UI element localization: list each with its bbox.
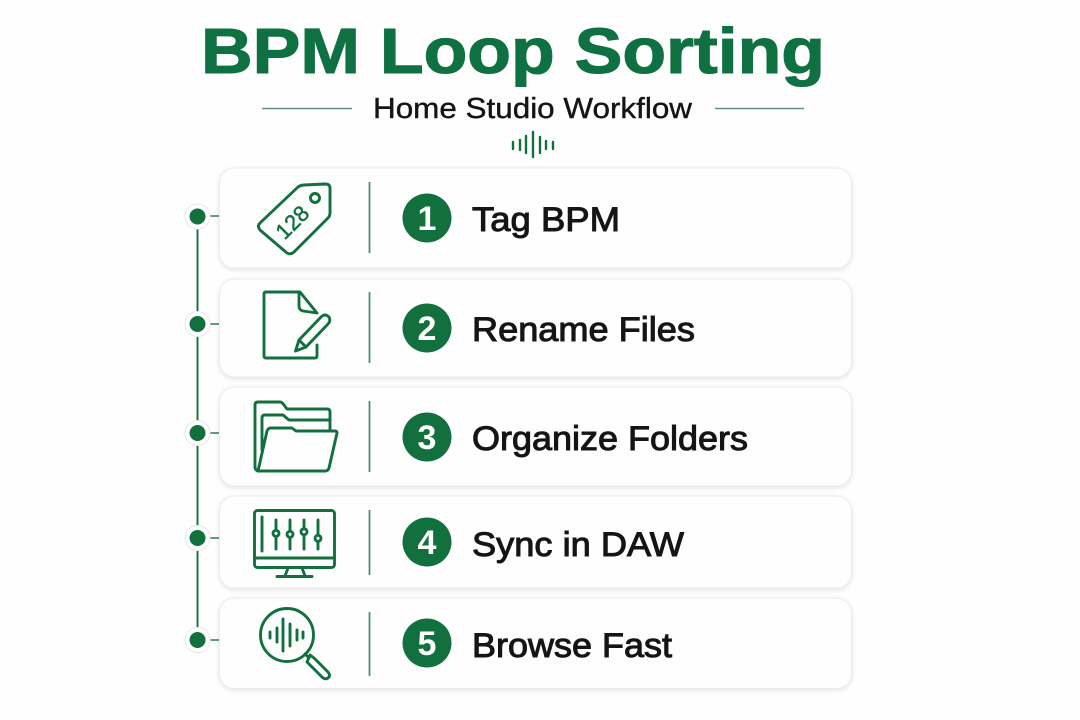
number badge 1 bbox=[402, 194, 452, 242]
icon: magnifier with waveform bbox=[260, 608, 330, 679]
icon: open folders bbox=[255, 402, 337, 471]
number badge 1: 1 bbox=[418, 200, 436, 238]
timeline rail bbox=[185, 204, 219, 652]
label: Rename Files bbox=[472, 311, 695, 349]
label: Organize Folders bbox=[472, 420, 748, 458]
number badge 2: 2 bbox=[418, 310, 436, 348]
subtitle with side rules: Home Studio Workflow bbox=[373, 93, 693, 125]
icon: monitor with faders bbox=[254, 510, 334, 576]
number badge 5 bbox=[402, 618, 452, 668]
timeline node 1 bbox=[185, 204, 219, 229]
panel: step 4 Sync in DAW bbox=[220, 496, 852, 588]
number badge 2 bbox=[402, 304, 452, 352]
number badge 4 bbox=[402, 518, 452, 566]
title: BPM Loop Sorting bbox=[201, 15, 825, 87]
panel: step 5 Browse Fast bbox=[220, 598, 852, 688]
number badge 5: 5 bbox=[418, 625, 436, 663]
icon: price tag 128: 128 bbox=[271, 201, 314, 244]
number badge 3 bbox=[402, 412, 452, 462]
timeline node 2 bbox=[185, 312, 219, 336]
panel: step 3 Organize Folders bbox=[220, 387, 852, 486]
label: Sync in DAW bbox=[472, 526, 684, 564]
label: Tag BPM bbox=[472, 201, 620, 239]
icon: document with pencil bbox=[264, 292, 330, 358]
label: Browse Fast bbox=[472, 627, 672, 665]
number badge 4: 4 bbox=[418, 524, 437, 562]
panel: step 1 Tag BPM bbox=[220, 168, 852, 268]
icon: price tag 128 bbox=[258, 184, 330, 254]
panel: step 2 Rename Files bbox=[220, 279, 852, 377]
icon: small waveform bbox=[513, 132, 553, 157]
timeline node 5 bbox=[185, 628, 219, 652]
number badge 3: 3 bbox=[418, 419, 436, 457]
timeline node 3 bbox=[185, 420, 219, 446]
timeline node 4 bbox=[185, 526, 219, 550]
